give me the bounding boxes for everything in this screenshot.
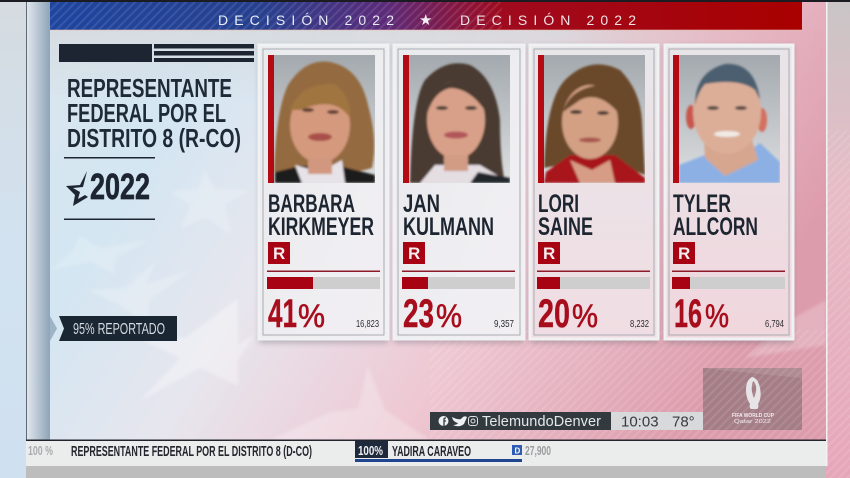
votes: 9,357 [494,319,514,330]
race title: REPRESENTANTE [67,73,232,103]
percent: % [298,298,325,334]
card: Barbara Kirkmeyer: KIRKMEYER [268,213,374,241]
card shadows [259,46,793,343]
race title: FEDERAL POR EL [67,98,226,128]
votes: 6,794 [765,319,784,330]
year emblem [64,157,155,220]
World Cup logo box [703,368,802,430]
vote bar [402,277,515,289]
ticker party badge: D [514,446,520,456]
name: LORI [538,190,579,218]
name: BARBARA [268,190,355,218]
ticker race: REPRESENTANTE FEDERAL POR EL DISTRITO 8 (D-CO) [71,443,312,460]
star icon [66,171,88,206]
name: TYLER [673,190,731,218]
vote bar [267,277,380,289]
party badge: R [678,244,690,263]
header star: ★ [419,11,432,29]
vote bar [672,277,785,289]
party badge [403,242,425,264]
ticker blue bar [355,459,522,462]
header text right: DECISIÓN 2022 [460,12,636,28]
card: Jan Kulmann: KULMANN [403,213,494,241]
percent: % [572,298,598,334]
party stripe [268,55,274,183]
percent: 20 [538,292,570,336]
percent: 16 [674,292,702,336]
social bar [430,412,611,430]
portrait [268,55,375,183]
party badge: R [543,244,555,263]
bottom ticker [26,440,826,478]
reported tag: 95% REPORTADO [73,321,165,338]
handle: TelemundoDenver [482,414,601,430]
portrait [673,55,780,183]
party stripe [403,55,409,183]
ticker votes: 27,900 [525,443,551,458]
portrait [403,55,510,183]
header text left: DECISIÓN 2022 [218,12,394,28]
party badge [268,242,290,264]
vote bar [537,277,650,289]
card: Jan Kulmann [394,45,524,339]
party stripe [538,55,544,183]
votes: 8,232 [630,319,649,330]
party stripe [673,55,679,183]
ticker percent box: 100% [358,443,383,458]
year: 2022 [90,166,150,207]
flag motif [59,44,254,62]
race title: DISTRITO 8 (R-CO) [67,123,241,153]
name: JAN [403,190,440,218]
percent: 23 [403,292,434,336]
percent: % [436,298,462,334]
time and temperature [611,412,703,430]
ticker party badge [512,445,522,456]
votes: 16,823 [356,319,379,330]
party badge [673,242,695,264]
card: Tyler Allcorn [665,45,793,339]
percent: % [705,298,729,334]
ticker left percent: 100 % [28,443,53,458]
party badge: R [408,244,420,263]
reported tag [50,316,177,341]
card: Lori Saine: SAINE [538,213,593,241]
percent: 41 [268,292,297,336]
logo text: FIFA WORLD CUP [732,413,775,419]
party badge: R [273,244,285,263]
card: Tyler Allcorn: ALLCORN [673,213,758,241]
top black edge [0,0,850,2]
card: Lori Saine [530,45,658,339]
social icons [438,416,478,426]
header bar [50,2,802,30]
time and temperature: 78° [672,414,695,430]
card: Barbara Kirkmeyer [259,45,388,339]
time and temperature: 10:03 [621,414,659,430]
portrait [538,55,645,183]
trophy [746,377,761,409]
World Cup logo box: Qatar 2022 [734,419,771,425]
ticker candidate: YADIRA CARAVEO [392,443,471,460]
race title [67,73,241,153]
party badge [538,242,560,264]
